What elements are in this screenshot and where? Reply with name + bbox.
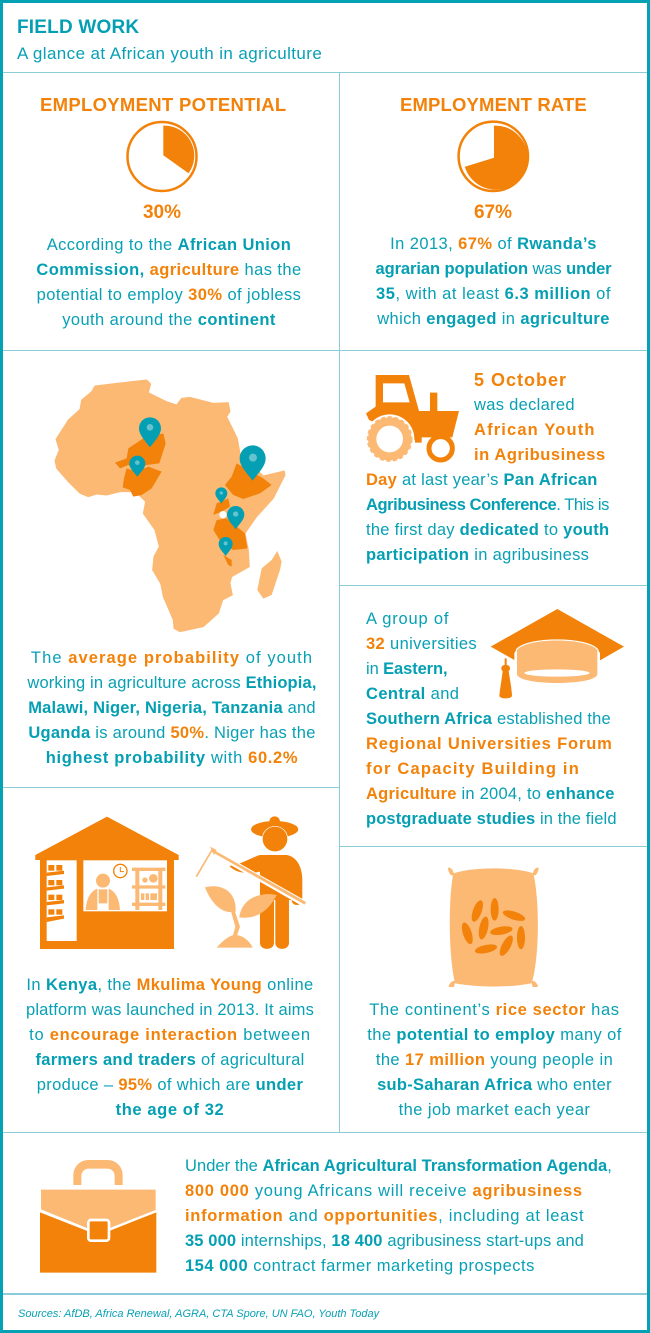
text: agribusiness day: [366, 370, 609, 564]
panel: employment potential: [36, 94, 302, 329]
panel: transformation agenda: [40, 1157, 612, 1275]
icon: farmer with hoe and plant: [196, 816, 306, 949]
text: employment rate: which engaged in agriculture: [377, 310, 610, 328]
pie chart: 67%: [457, 120, 530, 192]
value: 30%: 30%: [143, 202, 181, 223]
text: agribusiness day: in Agribusiness: [474, 446, 606, 464]
text: transformation agenda: [185, 1157, 612, 1275]
text: employment rate: [375, 235, 612, 328]
text: employment potential: Commission, agriculture has the: [36, 261, 302, 279]
icon: tractor: [366, 375, 459, 462]
text: probability: working in agriculture across Ethiopia,: [27, 674, 317, 692]
text: agribusiness day: Agribusiness Conference. This is: [366, 496, 609, 514]
text: employment rate: 35, with at least 6.3 million of: [376, 285, 611, 303]
panel: agribusiness day: [366, 370, 609, 564]
text: Kenya platform: [26, 976, 314, 1119]
text: universities: 32 universities: [366, 635, 477, 653]
text: probability: highest probability with 60.2%: [46, 749, 298, 767]
subtitle: A glance at African youth in agriculture: [17, 44, 322, 63]
text: probability: The average probability of youth: [31, 649, 313, 667]
text: Kenya platform: to encourage interaction between: [29, 1026, 311, 1044]
panel: universities: [366, 609, 624, 828]
text: universities: in Eastern,: [366, 660, 447, 678]
text: rice sector: [367, 1001, 622, 1119]
sources: Sources: AfDB, Africa Renewal, AGRA, CTA Spore, UN FAO, Youth Today: [18, 1308, 379, 1320]
text: universities: postgraduate studies in the field: [366, 810, 617, 828]
text: rice sector: the 17 million young people in: [376, 1051, 613, 1069]
text: Kenya platform: the age of 32: [116, 1101, 224, 1119]
title: FIELD WORK: [17, 17, 139, 38]
text: agribusiness day: Day at last year’s Pan African: [366, 471, 598, 489]
text: universities: [366, 610, 617, 828]
text: Kenya platform: produce – 95% of which are under: [37, 1076, 303, 1094]
text: agribusiness day: was declared: [474, 396, 575, 414]
text: rice sector: The continent’s rice sector has: [369, 1001, 620, 1019]
text: universities: Agriculture in 2004, to enhance: [366, 785, 615, 803]
text: universities: Regional Universities Forum: [366, 735, 613, 753]
text: employment potential: According to the African Union: [47, 236, 291, 254]
text: transformation agenda: 800 000 young Africans will receive agribusiness: [185, 1182, 583, 1200]
text: employment potential: youth around the continent: [62, 311, 276, 329]
pie chart: 30%: [126, 120, 198, 192]
heading: employment rate: EMPLOYMENT RATE: [400, 94, 587, 115]
panel: Kenya platform: [26, 816, 314, 1119]
text: probability: Malawi, Niger, Nigeria, Tanzania and: [28, 699, 316, 717]
text: transformation agenda: Under the African Agricultural Transformation Agenda,: [185, 1157, 612, 1175]
icon: rice sack: [448, 868, 539, 987]
icon: market stall: [35, 816, 179, 949]
text: employment potential: potential to employ 30% of jobless: [37, 286, 301, 304]
text: rice sector: the potential to employ many of: [367, 1026, 622, 1044]
text: employment rate: In 2013, 67% of Rwanda’s: [390, 235, 597, 253]
map of Africa: [54, 380, 286, 632]
panel: probability map: [27, 380, 317, 767]
text: Kenya platform: farmers and traders of agricultural: [35, 1051, 305, 1069]
text: employment potential: [36, 236, 302, 329]
heading: employment potential: EMPLOYMENT POTENTIAL: [40, 94, 286, 115]
text: agribusiness day: African Youth: [474, 421, 596, 439]
text: transformation agenda: information and opportunities, including at least: [185, 1207, 584, 1225]
text: rice sector: the job market each year: [399, 1101, 590, 1119]
text: probability: Uganda is around 50%. Niger has the: [28, 724, 316, 742]
text: employment rate: agrarian population was under: [375, 260, 612, 278]
text: transformation agenda: 35 000 internships, 18 400 agribusiness start-ups and: [185, 1232, 584, 1250]
text: agribusiness day: the first day dedicated to youth: [366, 521, 609, 539]
text: agribusiness day: 5 October: [474, 370, 567, 390]
icon: briefcase: [40, 1160, 156, 1273]
text: Kenya platform: In Kenya, the Mkulima Young online: [26, 976, 314, 994]
text: probability: [27, 649, 317, 767]
value: 67%: 67%: [474, 202, 512, 223]
text: transformation agenda: 154 000 contract farmer marketing prospects: [185, 1257, 535, 1275]
panel: rice sector: [367, 868, 622, 1119]
text: rice sector: sub-Saharan Africa who enter: [377, 1076, 612, 1094]
icon: graduation cap: [490, 609, 624, 698]
text: universities: Southern Africa established the: [366, 710, 611, 728]
text: universities: A group of: [366, 610, 449, 628]
panel: employment rate: [375, 94, 612, 328]
text: Kenya platform: platform was launched in 2013. It aims: [26, 1001, 314, 1019]
text: universities: for Capacity Building in: [366, 760, 580, 778]
text: universities: Central and: [366, 685, 459, 703]
text: agribusiness day: participation in agribusiness: [366, 546, 589, 564]
